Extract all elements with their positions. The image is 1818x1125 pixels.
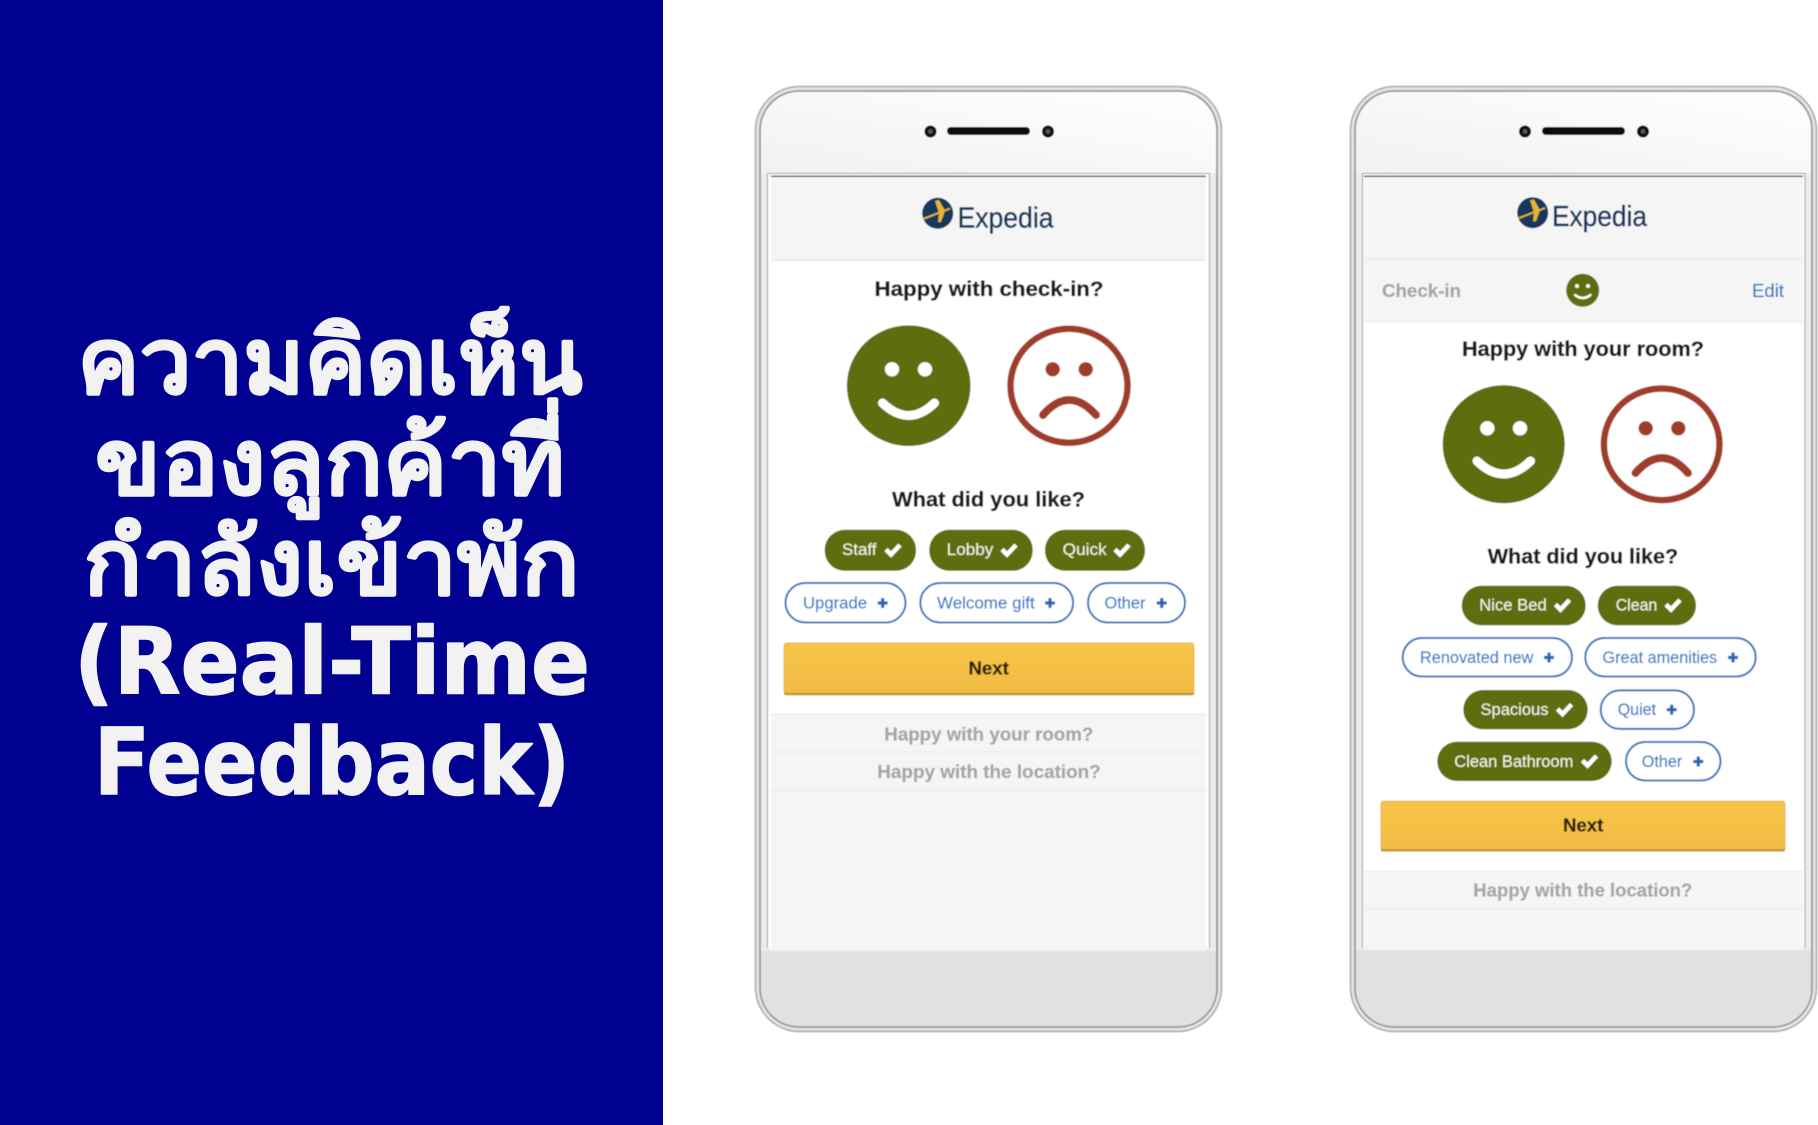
tag: Quick selected xyxy=(1045,530,1145,571)
phone: check-in feedback xyxy=(756,86,1222,1032)
title: ของลูกค้าที่ xyxy=(95,397,565,520)
heading: happy with check-in: Happy with check-in? xyxy=(874,277,1104,301)
tag: Clean Bathroom selected xyxy=(1437,742,1612,781)
tag: Upgrade xyxy=(786,583,906,622)
tag: Renovated new xyxy=(1403,638,1572,676)
button: Next: Next xyxy=(968,658,1009,678)
tag: Other: Other xyxy=(1642,753,1683,771)
heading: happy with your room: Happy with your room? xyxy=(1462,337,1704,361)
screen frame xyxy=(768,174,1210,948)
title xyxy=(74,306,590,816)
tag: Other: Other xyxy=(1104,594,1146,612)
logo: Expedia: Expedia xyxy=(958,202,1054,234)
phone body xyxy=(756,86,1222,1032)
phone: room feedback xyxy=(1350,86,1816,1032)
title: Feedback) xyxy=(94,709,570,816)
screen xyxy=(1364,176,1803,950)
screen xyxy=(771,176,1206,951)
tag: Other xyxy=(1088,583,1185,622)
title: กำลังเข้าพัก xyxy=(84,509,580,616)
tag: Clean selected xyxy=(1598,586,1696,625)
tag: Quick selected: Quick xyxy=(1063,541,1107,559)
heading: what did you like: What did you like? xyxy=(1488,544,1678,568)
tag: Spacious selected: Spacious xyxy=(1480,701,1548,719)
icon: sad face xyxy=(1604,388,1719,500)
tag: Great amenities xyxy=(1585,638,1756,676)
collapsed item: happy with your room: Happy with your room? xyxy=(884,724,1093,744)
phone body xyxy=(1350,86,1816,1032)
tag: Staff selected: Staff xyxy=(842,541,877,559)
tag: Clean selected: Clean xyxy=(1616,596,1657,614)
panel: blue title background xyxy=(0,0,663,1125)
collapsed item: happy with the location: Happy with the location? xyxy=(1473,880,1692,901)
tag: Spacious selected xyxy=(1463,690,1588,729)
tag: Nice Bed selected xyxy=(1462,586,1586,625)
button: Next xyxy=(784,643,1194,695)
completed row: check-in xyxy=(1382,274,1784,307)
tag: Great amenities: Great amenities xyxy=(1602,649,1717,667)
speaker and cameras xyxy=(924,126,1054,138)
button: Next xyxy=(1381,801,1785,851)
collapsed item: happy with the location: Happy with the location? xyxy=(877,761,1101,782)
tag: Lobby selected: Lobby xyxy=(947,541,994,559)
heading: what did you like: What did you like? xyxy=(892,488,1085,512)
icon: happy face xyxy=(1443,385,1565,503)
logo: Expedia: Expedia xyxy=(1552,201,1648,233)
title: ความคิดเห็น xyxy=(78,306,583,415)
completed row: check-in: Check-in xyxy=(1382,280,1461,301)
tag: Clean Bathroom selected: Clean Bathroom xyxy=(1454,753,1573,771)
logo: Expedia xyxy=(922,198,1054,234)
tag: Welcome gift xyxy=(920,583,1073,622)
screen frame xyxy=(1362,174,1805,948)
title: (Real-Time xyxy=(74,608,590,716)
tag: Nice Bed selected: Nice Bed xyxy=(1479,596,1547,614)
logo: Expedia xyxy=(1517,197,1648,233)
tag: Lobby selected xyxy=(929,530,1033,571)
speaker and cameras xyxy=(1519,126,1649,138)
tag: Quiet xyxy=(1601,690,1694,729)
icon: happy face xyxy=(847,325,970,446)
tag: Other xyxy=(1626,742,1720,780)
tag: Renovated new: Renovated new xyxy=(1420,649,1533,667)
tag: Quiet: Quiet xyxy=(1618,701,1656,719)
tag: Staff selected xyxy=(825,530,916,571)
tag: Welcome gift: Welcome gift xyxy=(937,594,1035,612)
button: Next: Next xyxy=(1563,814,1603,836)
icon: sad face xyxy=(1010,329,1128,443)
completed row: check-in: Edit xyxy=(1752,280,1784,301)
tag: Upgrade: Upgrade xyxy=(803,594,867,612)
